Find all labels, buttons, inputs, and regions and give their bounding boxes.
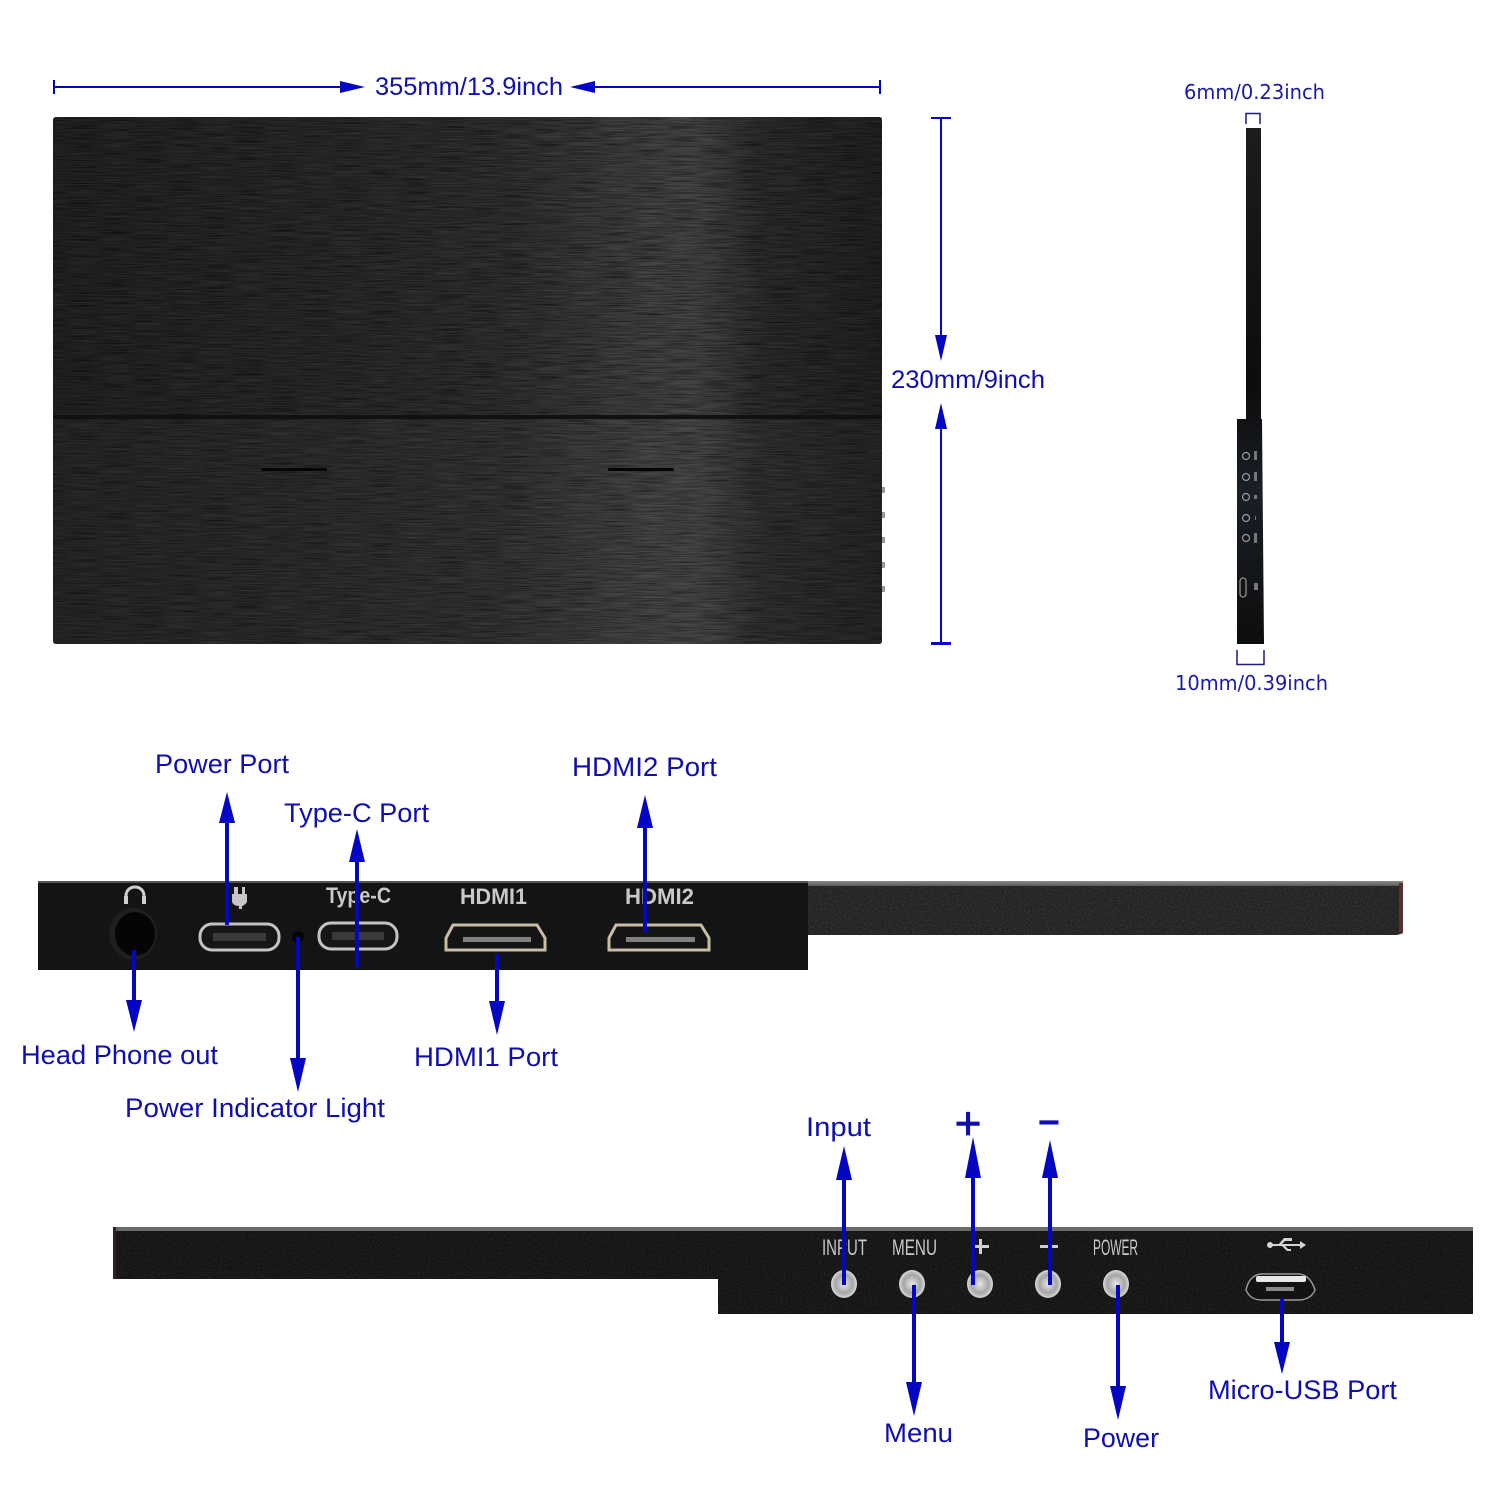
panel: monitor back xyxy=(53,117,885,644)
callout: HDMI1 Port: HDMI1 Port xyxy=(414,1042,559,1072)
callout: HDMI2 Port xyxy=(572,752,718,932)
callout: minus xyxy=(1038,1102,1060,1285)
power port xyxy=(200,924,279,950)
width dimension: 355mm xyxy=(53,73,881,101)
headphone jack xyxy=(109,908,157,960)
callout: Micro-USB Port: Micro-USB Port xyxy=(1208,1375,1397,1405)
button labels: MENU xyxy=(892,1235,937,1260)
icon: power plug xyxy=(232,887,247,909)
hardware buttons xyxy=(831,1270,1129,1298)
height dimension: 230mm: 230mm/9inch xyxy=(891,366,1045,394)
height dimension: 230mm xyxy=(891,117,1045,645)
type-c port: Type-C xyxy=(326,883,391,908)
button labels: POWER xyxy=(1093,1235,1138,1260)
callout: HDMI1 Port xyxy=(414,954,559,1072)
icon: USB symbol xyxy=(1267,1238,1306,1251)
side view label: 10mm xyxy=(1175,650,1328,695)
type-c port xyxy=(319,883,397,949)
button labels xyxy=(822,1235,1138,1260)
callout: Micro-USB Port xyxy=(1208,1298,1397,1405)
side view of monitor xyxy=(1237,128,1264,644)
callout: Power: Power xyxy=(1083,1423,1159,1453)
panel: port side edge xyxy=(38,881,1403,970)
callout: plus: + xyxy=(955,1097,981,1149)
callout: Input: Input xyxy=(806,1112,872,1142)
HDMI2 port xyxy=(609,884,709,950)
callout: Power Indicator Light: Power Indicator Light xyxy=(125,1093,386,1123)
HDMI2 port: HDMI2 xyxy=(625,884,694,909)
HDMI1 port xyxy=(446,884,545,950)
callout: HDMI2 Port: HDMI2 Port xyxy=(572,752,718,782)
callout: Menu xyxy=(884,1285,953,1448)
callout: Head Phone out: Head Phone out xyxy=(21,1040,218,1070)
callout: Power xyxy=(1083,1285,1159,1453)
callout: Input xyxy=(806,1112,872,1285)
callout: Head Phone out xyxy=(21,950,218,1070)
callout: Menu: Menu xyxy=(884,1418,953,1448)
icon: headphones xyxy=(124,887,146,904)
callout: Type-C Port xyxy=(284,798,429,967)
power indicator light xyxy=(292,931,304,943)
side view label: 6mm: 6mm/0.23inch xyxy=(1184,80,1325,104)
micro-USB port xyxy=(1246,1274,1315,1300)
callout: minus: − xyxy=(1038,1102,1060,1144)
callout: plus xyxy=(955,1097,981,1285)
width dimension: 355mm: 355mm/13.9inch xyxy=(375,73,563,101)
callout: Type-C Port: Type-C Port xyxy=(284,798,429,828)
button labels: INPUT xyxy=(822,1235,867,1260)
panel: button side edge xyxy=(113,1227,1473,1314)
side view label: 10mm: 10mm/0.39inch xyxy=(1175,671,1328,695)
side view label: 6mm xyxy=(1184,80,1325,124)
callout: Power Port: Power Port xyxy=(155,749,289,779)
callout: Power Indicator Light xyxy=(125,937,386,1123)
HDMI1 port: HDMI1 xyxy=(460,884,527,909)
callout: Power Port xyxy=(155,749,289,925)
